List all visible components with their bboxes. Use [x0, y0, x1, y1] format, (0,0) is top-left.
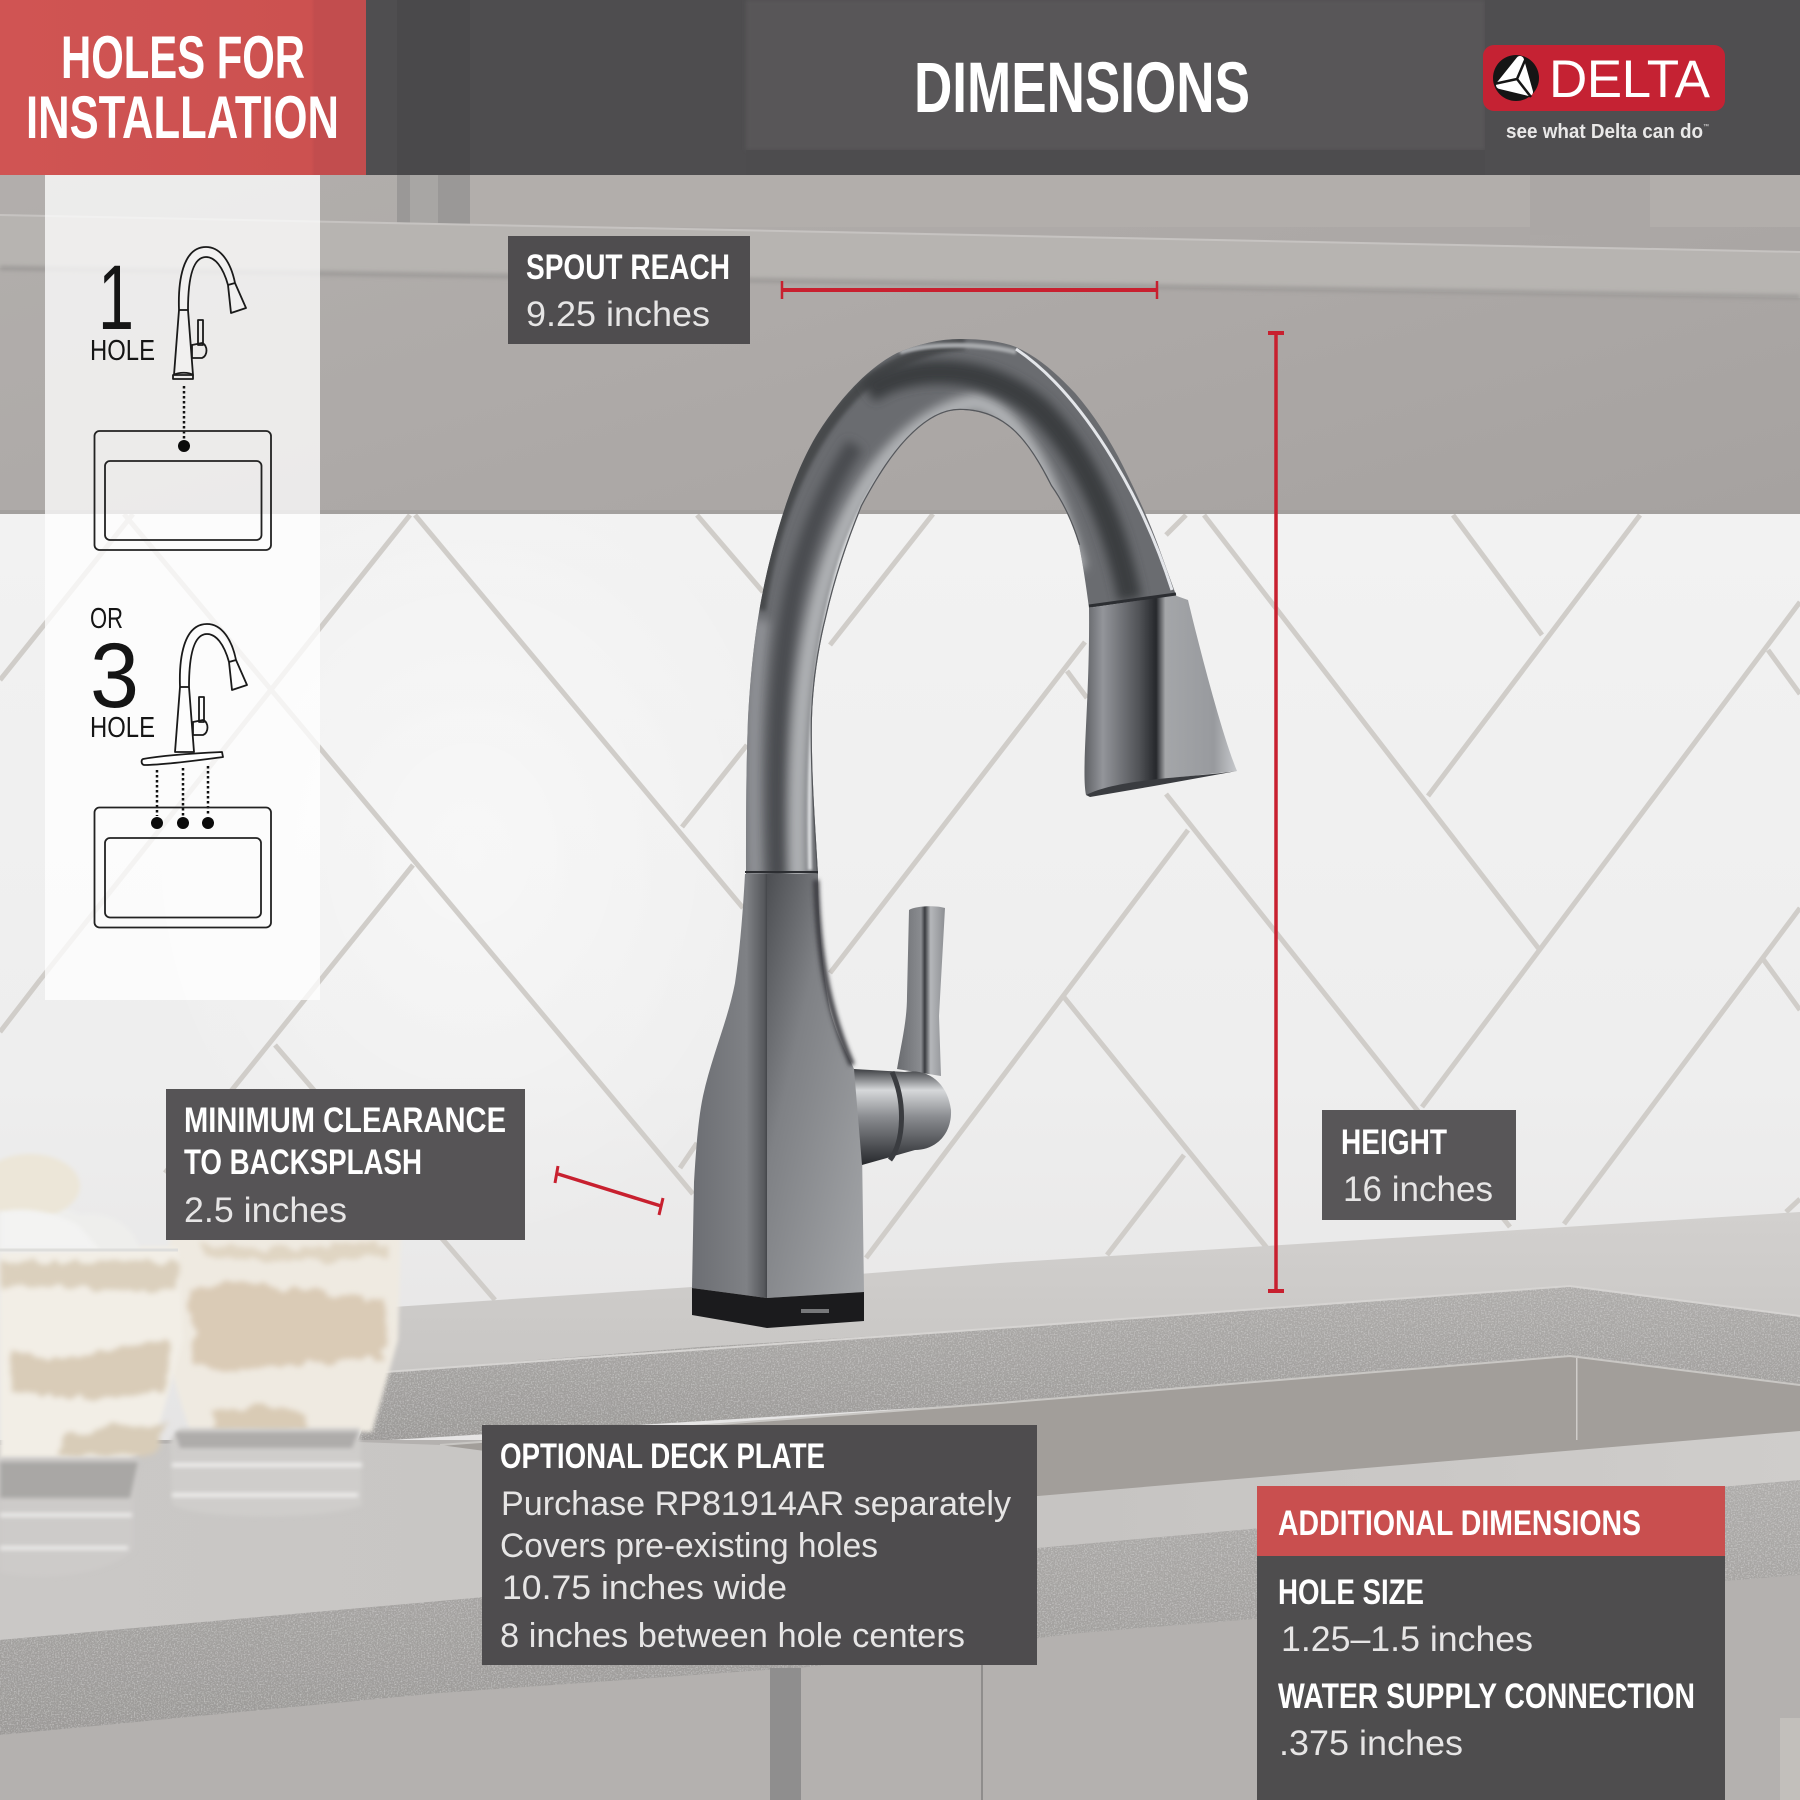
three hole label	[90, 603, 155, 744]
three hole label: 3	[90, 625, 139, 727]
arrow: backsplash clearance line	[555, 1166, 663, 1215]
callout: spout reach: 9.25 inches	[526, 295, 710, 334]
callout: optional deck plate: Purchase RP81914AR separately	[501, 1485, 1011, 1523]
icon: one hole sink	[94, 386, 271, 550]
callout: optional deck plate	[482, 1425, 1037, 1665]
heading: additional dimensions	[1257, 1486, 1725, 1556]
one hole label: 1	[98, 247, 134, 349]
text: water supply connection: .375 inches	[1279, 1724, 1463, 1763]
logo: delta	[1483, 45, 1725, 143]
faucet	[692, 339, 1237, 1328]
faucet: spout tube	[746, 339, 1176, 880]
sink basin	[440, 1356, 1800, 1496]
callout: minimum clearance to backsplash: MINIMUM CLEARANCE	[184, 1101, 506, 1140]
callout: minimum clearance to backsplash: TO BACKSPLASH	[184, 1143, 422, 1182]
tile backsplash	[0, 450, 1800, 1460]
callout: height	[1322, 1110, 1516, 1220]
panel: additional dimensions	[1257, 1486, 1725, 1800]
callout: optional deck plate: OPTIONAL DECK PLATE	[500, 1437, 825, 1476]
text: hole size: HOLE SIZE	[1278, 1573, 1424, 1612]
desserts in glasses	[0, 1154, 402, 1577]
three hole label: OR	[90, 603, 123, 635]
text: water supply connection	[1278, 1677, 1695, 1763]
wood cabinet background	[0, 0, 1800, 514]
three hole label: HOLE	[90, 712, 155, 744]
title: holes for installation: HOLES FOR	[61, 24, 305, 91]
arrow: height dimension line	[1268, 333, 1284, 1291]
callout: optional deck plate: 8 inches between hole centers	[500, 1617, 965, 1655]
text: hole size	[1278, 1573, 1533, 1659]
logo: delta: DELTA	[1549, 50, 1711, 109]
dessert: left glass	[0, 1154, 183, 1577]
faucet: spray head	[1084, 594, 1237, 797]
icon: one hole faucet	[173, 247, 246, 379]
callout: height: 16 inches	[1343, 1170, 1493, 1209]
one hole label	[90, 247, 155, 367]
callout: spout reach	[508, 236, 750, 344]
countertop back	[357, 1212, 1800, 1442]
logo: delta: see what Delta can do	[1506, 121, 1703, 143]
callout: height: HEIGHT	[1341, 1123, 1447, 1162]
callout: minimum clearance to backsplash: 2.5 inches	[184, 1191, 347, 1230]
logo: delta: ™	[1703, 123, 1709, 130]
callout: minimum clearance to backsplash	[166, 1089, 525, 1240]
callout: spout reach: SPOUT REACH	[526, 248, 730, 287]
title: dimensions: DIMENSIONS	[914, 49, 1250, 128]
dessert: right glass	[165, 1190, 402, 1516]
panel: holes for installation	[45, 175, 320, 1000]
heading: additional dimensions: ADDITIONAL DIMENSIONS	[1278, 1504, 1641, 1543]
callout: optional deck plate: 10.75 inches wide	[502, 1569, 787, 1607]
one hole label: HOLE	[90, 335, 155, 367]
header bar	[0, 0, 1800, 175]
text: water supply connection: WATER SUPPLY CONNECTION	[1278, 1677, 1695, 1716]
title: holes for installation	[0, 0, 366, 175]
title: holes for installation: INSTALLATION	[26, 84, 339, 151]
icon: three hole faucet with deck plate	[142, 624, 247, 765]
icon: three hole sink	[94, 766, 271, 928]
text: hole size: 1.25–1.5 inches	[1281, 1620, 1533, 1659]
faucet: body	[692, 872, 864, 1328]
faucet: handle	[854, 906, 951, 1165]
lower counter and cabinets	[0, 1400, 1800, 1800]
callout: optional deck plate: Covers pre-existing holes	[500, 1527, 878, 1565]
arrow: spout reach dimension line	[782, 281, 1157, 299]
